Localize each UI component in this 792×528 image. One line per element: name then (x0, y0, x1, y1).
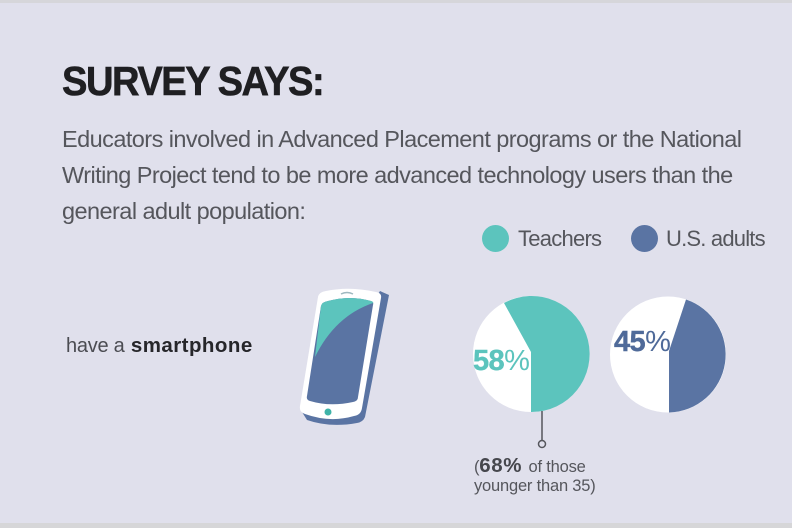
pie chart: teachers 58% (473, 296, 590, 412)
callout text: (68% of those (474, 454, 586, 477)
row label: have a smartphone: have a smartphone (66, 334, 253, 357)
value: 45%: 45% (614, 326, 670, 358)
legend: U.S. adults (631, 225, 765, 252)
intro text: Educators involved in Advanced Placement programs or the National (62, 126, 741, 152)
legend: U.S. adults: U.S. adults (666, 226, 765, 251)
intro text: general adult population: (62, 198, 305, 224)
title: SURVEY SAYS: (62, 58, 323, 104)
value: 58%: 58% (473, 345, 529, 377)
icon: smartphone (300, 288, 389, 425)
callout leader line (538, 411, 546, 448)
callout text: younger than 35) (474, 477, 596, 495)
intro text (62, 126, 741, 224)
intro text: Writing Project tend to be more advanced technology users than the (62, 162, 733, 188)
legend (482, 225, 765, 252)
legend: teachers: Teachers (518, 226, 601, 251)
callout text (474, 454, 596, 495)
legend: teachers (482, 225, 602, 252)
pie chart: U.S. adults 45% (610, 296, 726, 412)
